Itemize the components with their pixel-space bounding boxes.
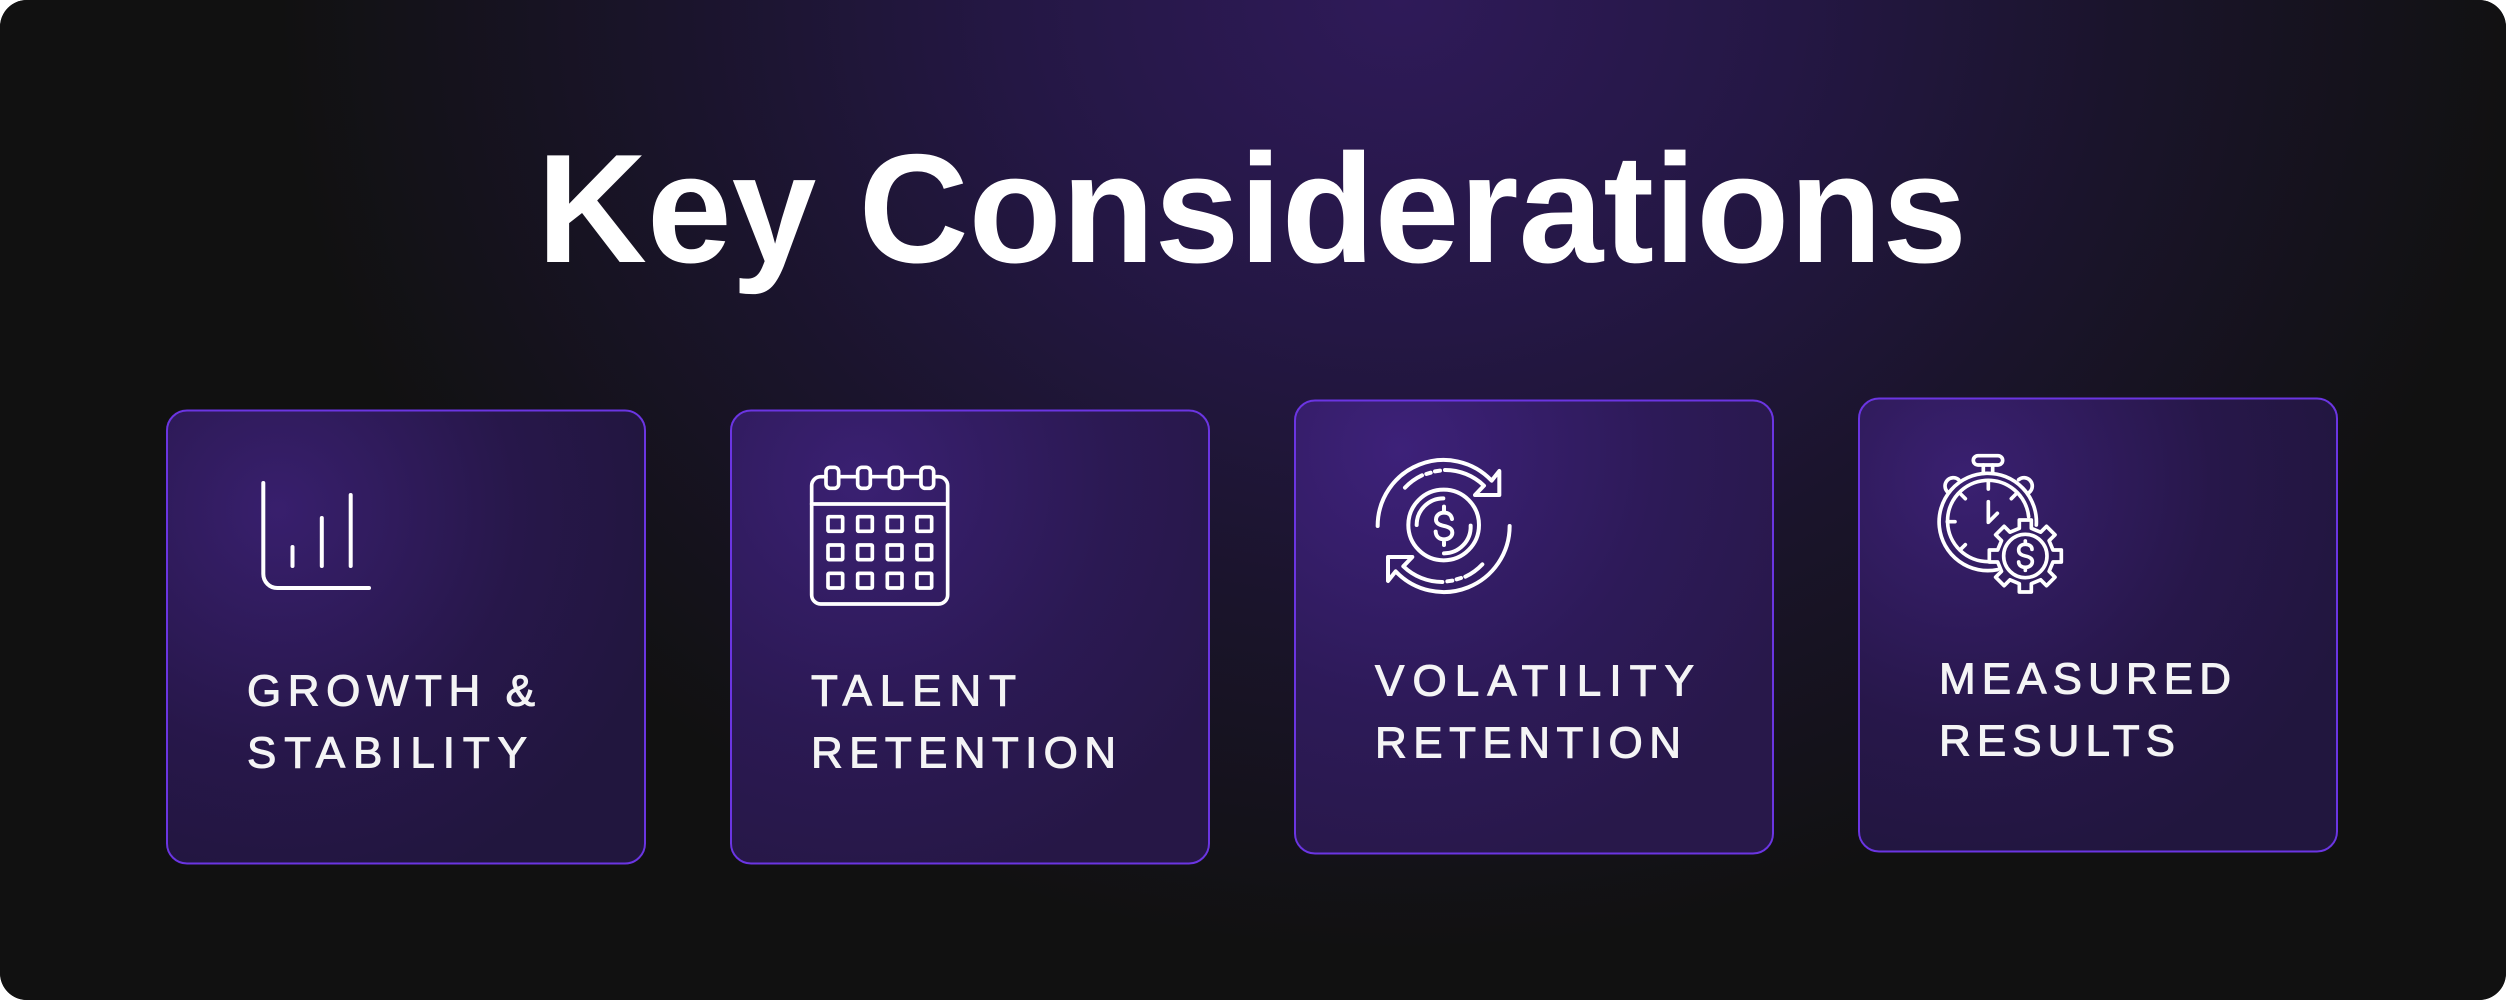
title: Key Considerations xyxy=(537,122,1967,295)
heading: measured results xyxy=(1939,654,2231,766)
heading: volatility retention: RETENTION xyxy=(1375,718,1681,768)
heading: talent retention: TALENT xyxy=(811,666,1016,716)
heading: talent retention xyxy=(811,666,1116,778)
icon: bar chart xyxy=(263,483,369,588)
heading: volatility retention: VOLATILITY xyxy=(1375,656,1694,706)
heading: growth and stability: STABILITY xyxy=(247,728,527,778)
panel: measured results xyxy=(1859,398,2337,852)
heading: measured results: RESULTS xyxy=(1939,716,2175,766)
heading: talent retention: RETENTION xyxy=(811,728,1116,778)
heading: measured results: MEASURED xyxy=(1939,654,2231,704)
panel: volatility retention xyxy=(1295,400,1773,854)
heading: volatility retention xyxy=(1375,656,1694,768)
panel: growth and stability xyxy=(167,410,645,864)
heading: growth and stability xyxy=(247,666,535,778)
icon: stopwatch with dollar gear xyxy=(1939,456,2061,592)
icon: circular dollar arrows xyxy=(1378,460,1510,592)
panel: talent retention xyxy=(731,410,1209,864)
icon: calendar xyxy=(812,467,948,604)
heading: growth and stability: GROWTH & xyxy=(247,666,535,716)
